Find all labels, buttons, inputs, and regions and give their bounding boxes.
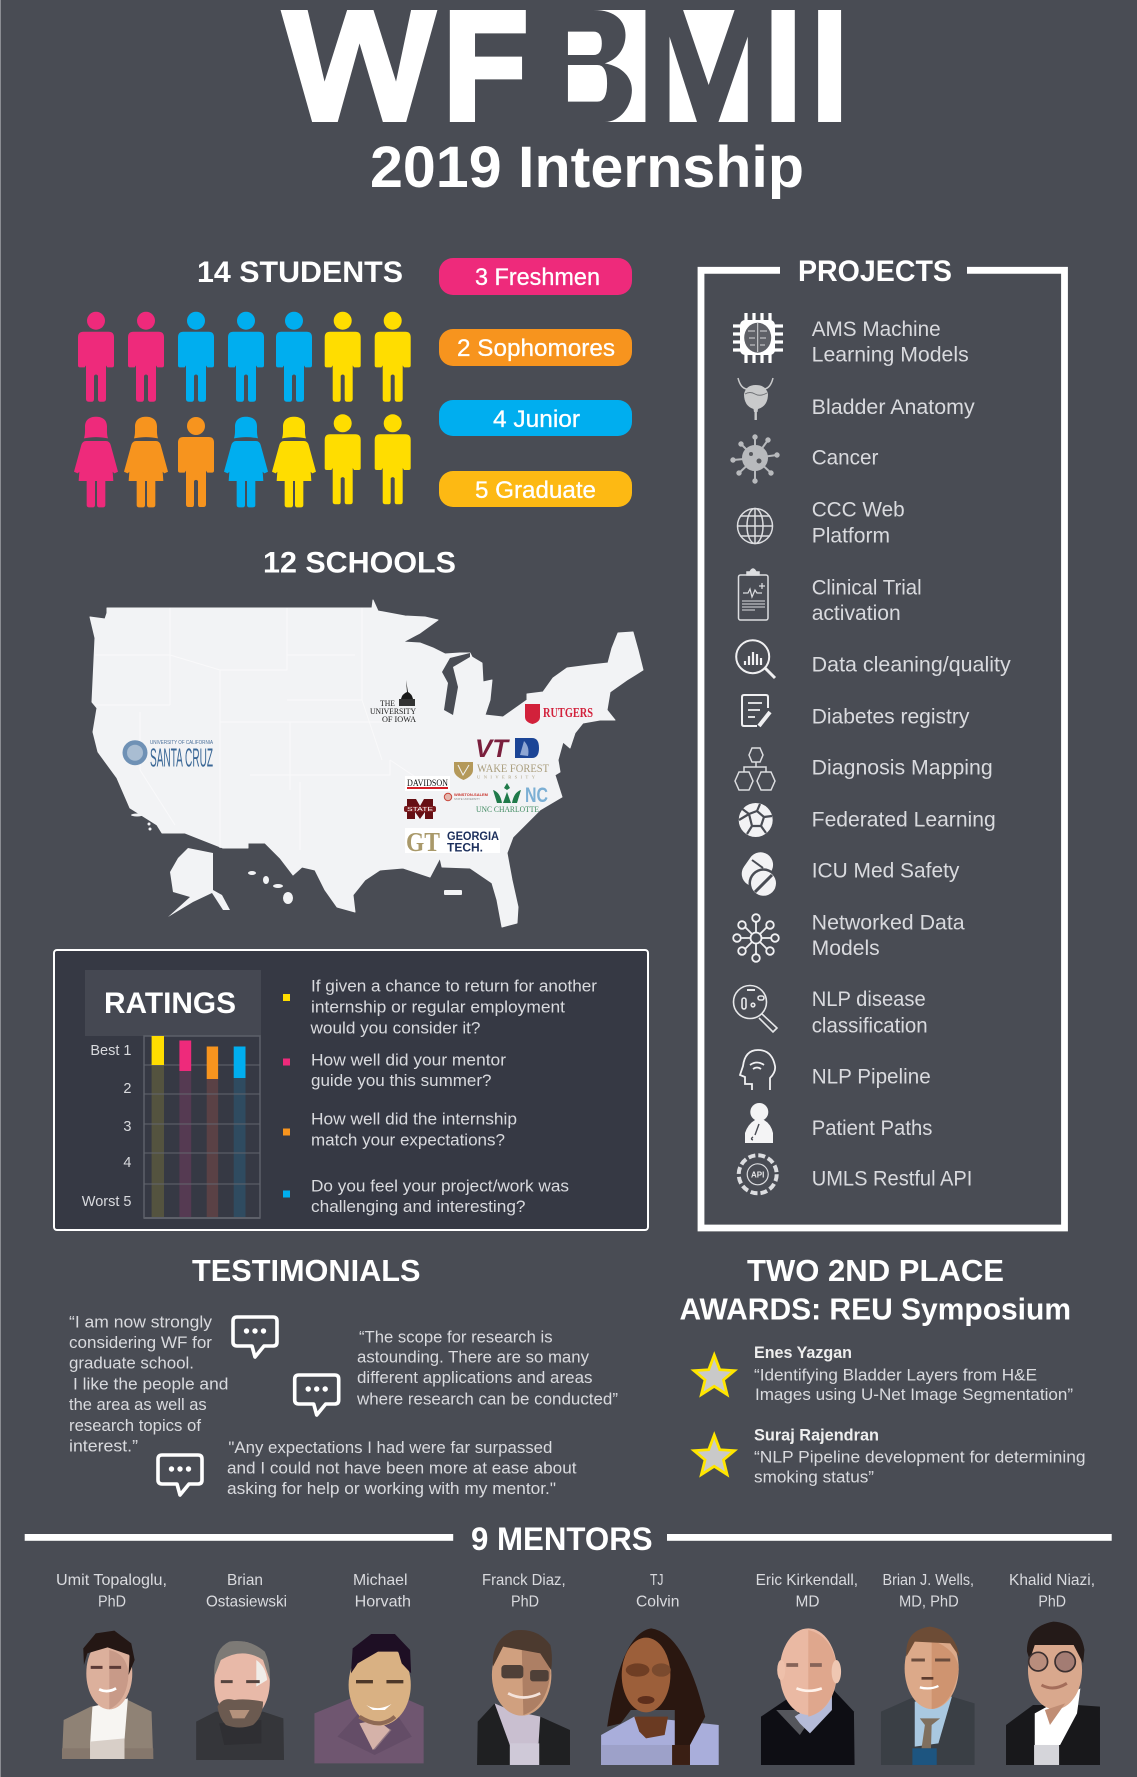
legend question: return: would you consider it? bbox=[309, 1018, 480, 1038]
pill: 4 Junior bbox=[439, 400, 632, 436]
text: Clinical Trial activation bbox=[812, 576, 922, 625]
testimonial 1: graduate school. bbox=[69, 1353, 194, 1372]
mentor names: Franck Diaz, bbox=[482, 1572, 566, 1589]
logo: Winston-Salem State bbox=[444, 792, 489, 801]
legend question: return bbox=[283, 976, 597, 1038]
award: Enes Yazgan: Enes Yazgan bbox=[754, 1343, 852, 1362]
icon: star 1 bbox=[694, 1355, 734, 1395]
icon: hexagon tree bbox=[735, 748, 775, 790]
heading: testimonials: TESTIMONIALS bbox=[192, 1253, 420, 1288]
logo: Wake Forest: UNIVERSITY bbox=[477, 774, 536, 780]
testimonial 3: asking for help or working with my mentor." bbox=[227, 1479, 556, 1498]
mentor names: Khalid Niazi, bbox=[1009, 1572, 1095, 1589]
legend question: return: internship or regular employment bbox=[311, 998, 565, 1017]
logo: UNC Charlotte bbox=[476, 783, 539, 814]
icon: API gear: API bbox=[751, 1170, 764, 1180]
mentor names: PhD bbox=[1038, 1593, 1066, 1610]
text: NLP disease classification: NLP disease bbox=[812, 988, 926, 1011]
bar chart: ratings bbox=[82, 1036, 260, 1219]
testimonial 1: considering WF for bbox=[69, 1333, 212, 1352]
text: Networked Data Models: Networked Data bbox=[812, 911, 965, 934]
testimonial 1: I like the people and bbox=[73, 1375, 228, 1394]
text: AMS Machine Learning Models: Learning Models bbox=[812, 344, 969, 367]
portrait: Michael Horvath bbox=[314, 1634, 424, 1763]
heading: awards: TWO 2ND PLACE bbox=[747, 1253, 1004, 1288]
logo: Davidson: DAVIDSON bbox=[407, 779, 448, 789]
mentor names: TJ bbox=[650, 1572, 664, 1589]
icon: note and pen bbox=[742, 695, 770, 726]
mentor names: Brian J. Wells, bbox=[882, 1572, 974, 1589]
icon: pills bbox=[737, 847, 778, 898]
logo: Georgia Tech: TECH. bbox=[447, 840, 483, 854]
logo: Mississippi State bbox=[404, 799, 436, 819]
legend question: expectations: How well did the internship bbox=[311, 1110, 517, 1129]
award: Enes Yazgan: “Identifying Bladder Layers from H&E bbox=[754, 1365, 1037, 1384]
award: Suraj Rajendran: smoking status” bbox=[754, 1468, 874, 1486]
testimonial 2: where research can be conducted” bbox=[356, 1389, 618, 1408]
heading: 9 mentors bbox=[25, 1521, 1112, 1557]
testimonial 3: and I could not have been more at ease about bbox=[227, 1459, 577, 1478]
icon: magnifier chart bbox=[736, 640, 775, 678]
mentor names: PhD bbox=[511, 1593, 539, 1610]
logo: University of Iowa bbox=[370, 680, 416, 724]
logo: University of Iowa: THE bbox=[380, 699, 395, 708]
testimonial 1: interest.” bbox=[69, 1437, 138, 1456]
pill: 2 Sophomores bbox=[439, 329, 632, 366]
map: United States with school logos bbox=[90, 600, 643, 927]
testimonial 1: the area as well as bbox=[69, 1395, 207, 1414]
legend question: expectations: match your expectations? bbox=[311, 1130, 505, 1149]
bar chart: ratings: 4 bbox=[123, 1155, 132, 1171]
text: Clinical Trial activation: activation bbox=[812, 602, 901, 625]
text: ICU Med Safety: ICU Med Safety bbox=[812, 859, 960, 882]
mentor names: Horvath bbox=[355, 1593, 411, 1610]
testimonial 2 bbox=[356, 1328, 618, 1408]
logo: UC Santa Cruz: UNIVERSITY OF CALIFORNIA bbox=[150, 740, 214, 746]
logo: Duke bbox=[515, 738, 539, 758]
legend question: return: If given a chance to return for another bbox=[311, 976, 597, 996]
legend question: project: Do you feel your project/work was bbox=[311, 1176, 569, 1195]
award: Enes Yazgan: Images using U-Net Image Segmentation” bbox=[755, 1385, 1073, 1404]
mentor names: PhD bbox=[98, 1593, 126, 1610]
map: United States with school logos: SANTA CRUZ bbox=[150, 742, 213, 772]
pill: 4 Junior: 4 Junior bbox=[493, 406, 580, 433]
logo: WF BMI bbox=[281, 10, 841, 122]
logo: Winston-Salem State: WINSTON-SALEM bbox=[454, 792, 489, 797]
text: Bladder Anatomy: Bladder Anatomy bbox=[812, 396, 975, 419]
text: Patient Paths: Patient Paths bbox=[812, 1117, 932, 1140]
text: AMS Machine Learning Models bbox=[812, 318, 969, 367]
testimonial 3 bbox=[227, 1438, 577, 1498]
logo: UNC Charlotte: UNC CHARLOTTE bbox=[476, 805, 539, 814]
award: Enes Yazgan bbox=[754, 1343, 1073, 1404]
logo: Virginia Tech: VT bbox=[475, 735, 511, 763]
icon: patient bbox=[745, 1103, 773, 1143]
bar chart: ratings: 2 bbox=[123, 1081, 132, 1097]
icon: clipboard bbox=[738, 569, 768, 620]
mentor names: Brian bbox=[227, 1572, 263, 1589]
logo: Georgia Tech: GEORGIA bbox=[447, 829, 499, 843]
icon: globe bbox=[738, 508, 772, 544]
logo: University of Iowa: OF IOWA bbox=[382, 715, 416, 724]
icon: cancer cell bbox=[731, 435, 779, 483]
legend question: mentor: guide you this summer? bbox=[311, 1071, 492, 1090]
title: 2019 Internship bbox=[370, 135, 804, 200]
heading: awards: AWARDS: REU Symposium bbox=[680, 1292, 1071, 1326]
text: Data cleaning/quality: Data cleaning/quality bbox=[812, 654, 1011, 677]
testimonial 1: “I am now strongly bbox=[69, 1312, 213, 1331]
mentor names: Umit Topaloglu, bbox=[56, 1572, 167, 1589]
portrait: Franck Diaz bbox=[477, 1630, 570, 1765]
text: CCC Web Platform: Platform bbox=[812, 524, 890, 547]
icon: speech bubble 2 bbox=[295, 1375, 339, 1415]
award: Suraj Rajendran bbox=[754, 1425, 1086, 1486]
text: NLP disease classification bbox=[812, 988, 928, 1037]
text: CCC Web Platform: CCC Web bbox=[812, 499, 905, 522]
icon: network bbox=[733, 914, 779, 962]
mentor names: Eric Kirkendall, bbox=[756, 1572, 858, 1589]
icon: federated ball bbox=[739, 803, 773, 837]
mentor names: Colvin bbox=[636, 1593, 680, 1610]
text: Networked Data Models: Models bbox=[812, 937, 880, 960]
legend question: mentor: How well did your mentor bbox=[311, 1051, 506, 1070]
panel: ratings bbox=[54, 950, 648, 1230]
text: AMS Machine Learning Models: AMS Machine bbox=[812, 318, 941, 341]
portrait: Brian Ostasiewski bbox=[196, 1641, 284, 1760]
logo: Georgia Tech bbox=[405, 827, 500, 857]
text: Clinical Trial activation: Clinical Trial bbox=[812, 576, 922, 599]
pill: 2 Sophomores: 2 Sophomores bbox=[457, 335, 615, 362]
award: Suraj Rajendran: Suraj Rajendran bbox=[754, 1425, 879, 1444]
heading: awards bbox=[680, 1253, 1071, 1326]
logo: Mississippi State: STATE bbox=[407, 807, 434, 813]
pill: 5 Graduate bbox=[439, 471, 632, 507]
award: Suraj Rajendran: “NLP Pipeline development for determining bbox=[754, 1448, 1086, 1467]
icon: API gear bbox=[739, 1155, 777, 1193]
bar chart: ratings: Best 1 bbox=[90, 1043, 132, 1059]
logo: Wake Forest: WAKE FOREST bbox=[477, 761, 550, 775]
mentor names: MD bbox=[796, 1593, 820, 1610]
mentor names: Ostasiewski bbox=[206, 1593, 287, 1610]
logo: Georgia Tech: GT bbox=[406, 827, 440, 857]
icon: speech bubble 3 bbox=[158, 1455, 202, 1495]
heading: 14 students: 14 STUDENTS bbox=[197, 256, 403, 289]
heading: 9 mentors: 9 MENTORS bbox=[471, 1521, 653, 1557]
bar chart: ratings: 3 bbox=[123, 1119, 132, 1135]
logo: UC Santa Cruz bbox=[122, 740, 214, 772]
icon: bladder bbox=[738, 378, 773, 420]
portrait: Khalid Niazi bbox=[1006, 1622, 1100, 1765]
ratings heading bbox=[85, 970, 261, 1036]
mentor names: Michael bbox=[353, 1572, 408, 1589]
text: Diabetes registry: Diabetes registry bbox=[812, 705, 970, 728]
testimonial 3: "Any expectations I had were far surpassed bbox=[228, 1438, 552, 1457]
panel: projects bbox=[701, 255, 1064, 1228]
text: NLP disease classification: classification bbox=[812, 1014, 928, 1037]
text: Networked Data Models bbox=[812, 911, 965, 960]
logo: Rutgers: RUTGERS bbox=[543, 706, 593, 721]
logo: UNC: NC bbox=[525, 784, 548, 807]
testimonial 2: “The scope for research is bbox=[359, 1328, 553, 1347]
legend question: expectations bbox=[283, 1110, 517, 1149]
ratings heading: RATINGS bbox=[104, 987, 236, 1020]
portrait: TJ Colvin bbox=[601, 1628, 719, 1765]
text: UMLS Restful API: UMLS Restful API bbox=[812, 1168, 972, 1191]
testimonial 2: different applications and areas bbox=[357, 1368, 592, 1387]
portrait: Brian J. Wells bbox=[881, 1627, 975, 1765]
icon: head bbox=[740, 1050, 775, 1090]
icon: chip brain bbox=[733, 313, 783, 363]
logo: Davidson bbox=[405, 776, 450, 791]
icon: speech bubble 1 bbox=[233, 1317, 277, 1357]
mentor names bbox=[56, 1572, 1095, 1610]
icon: star 2 bbox=[694, 1435, 734, 1475]
text: NLP Pipeline: NLP Pipeline bbox=[812, 1065, 931, 1088]
text: CCC Web Platform bbox=[812, 499, 905, 547]
testimonial 1 bbox=[69, 1312, 228, 1456]
heading: 12 schools: 12 SCHOOLS bbox=[263, 546, 456, 580]
mentor names: MD, PhD bbox=[899, 1593, 959, 1610]
logo: Wake Forest bbox=[454, 761, 550, 780]
testimonial 2: astounding. There are so many bbox=[357, 1348, 589, 1367]
logo: University of Iowa: UNIVERSITY bbox=[370, 707, 416, 716]
testimonial 1: research topics of bbox=[69, 1416, 201, 1435]
icon: magnifier disease bbox=[734, 986, 777, 1032]
logo: Winston-Salem State: STATE UNIVERSITY bbox=[454, 797, 480, 801]
legend question: mentor bbox=[283, 1051, 506, 1090]
pill: 3 Freshmen bbox=[439, 258, 632, 295]
text: Federated Learning: Federated Learning bbox=[812, 809, 996, 832]
text: Cancer: Cancer bbox=[812, 446, 878, 469]
pill: 3 Freshmen: 3 Freshmen bbox=[475, 264, 600, 291]
pictogram: students bbox=[74, 312, 411, 507]
projects heading: PROJECTS bbox=[798, 255, 952, 288]
legend question: project: challenging and interesting? bbox=[311, 1197, 526, 1216]
logo: Rutgers bbox=[525, 704, 593, 724]
legend question: project bbox=[283, 1176, 569, 1216]
bar chart: ratings: Worst 5 bbox=[82, 1194, 132, 1210]
portrait: Umit Topaloglu bbox=[62, 1631, 153, 1759]
text: Diagnosis Mapping: Diagnosis Mapping bbox=[812, 756, 993, 779]
pill: 5 Graduate: 5 Graduate bbox=[475, 477, 596, 504]
portrait: Eric Kirkendall bbox=[761, 1628, 855, 1765]
